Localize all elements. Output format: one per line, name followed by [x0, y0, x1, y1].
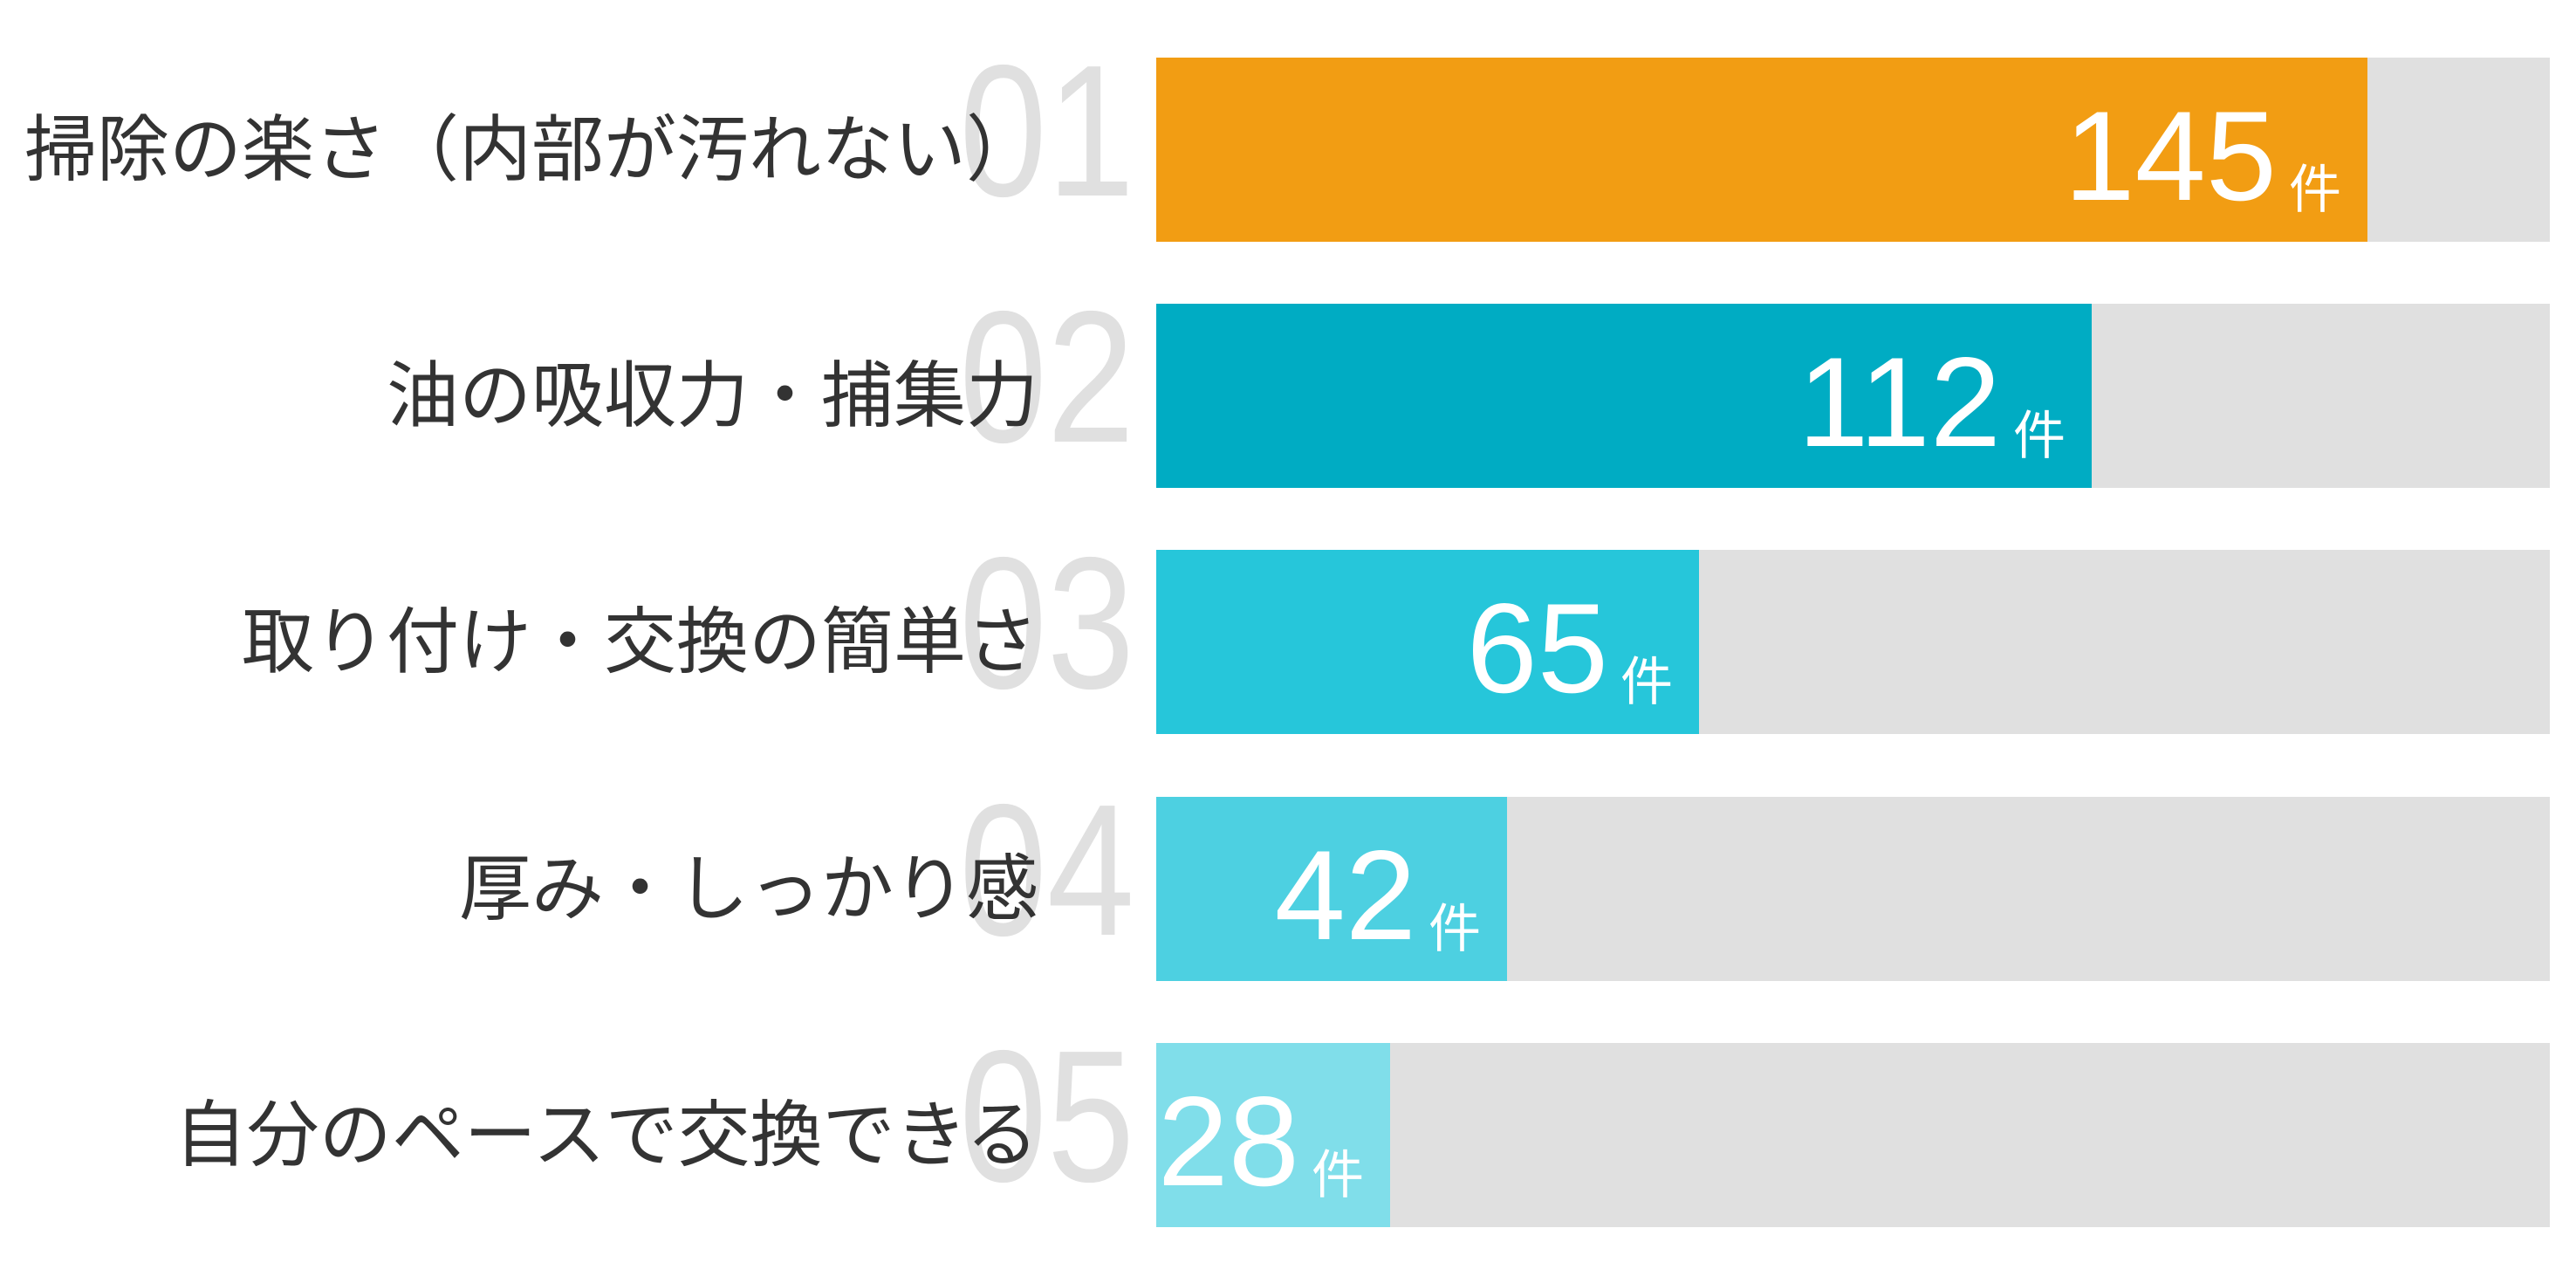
bar 5: [1156, 1043, 1390, 1227]
value 4: [1275, 824, 1481, 966]
label 5: 自分のペースで交換できる: [175, 1094, 1038, 1176]
value 3: 件: [1620, 653, 1673, 711]
value 1: 145: [2064, 85, 2277, 227]
value 5: 件: [1312, 1146, 1364, 1204]
row 5: [175, 1011, 2550, 1227]
value 3: 65: [1467, 577, 1608, 719]
track 3: [1156, 550, 2550, 734]
bar 1: [1156, 58, 2367, 242]
bar 4: [1156, 797, 1507, 981]
value 4: 42: [1275, 824, 1416, 966]
value 3: [1467, 577, 1673, 719]
rank number 02: 02: [959, 271, 1134, 482]
label 1: 掃除の楽さ（内部が汚れない）: [24, 109, 1038, 190]
label 2: 油の吸収力・捕集力: [387, 355, 1038, 436]
row 1: [24, 25, 2550, 242]
rank number 01: 01: [959, 25, 1134, 236]
rank number 04: 04: [959, 765, 1134, 975]
row 4: [459, 765, 2550, 981]
value 4: 件: [1428, 900, 1481, 958]
rank number 05: 05: [959, 1011, 1134, 1221]
value 5: 28: [1158, 1070, 1299, 1212]
track 4: [1156, 797, 2550, 981]
label 3: 取り付け・交換の簡単さ: [242, 601, 1038, 683]
label 4: 厚み・しっかり感: [459, 848, 1038, 930]
track 5: [1156, 1043, 2550, 1227]
value 5: [1158, 1070, 1364, 1212]
track 1: [1156, 58, 2550, 242]
row 2: [387, 271, 2550, 488]
track 2: [1156, 304, 2550, 488]
bar 3: [1156, 550, 1699, 734]
value 1: 件: [2289, 161, 2341, 219]
row 3: [242, 518, 2550, 734]
value 2: 件: [2013, 407, 2066, 465]
value 2: 112: [1798, 331, 2001, 473]
rank number 03: 03: [959, 518, 1134, 728]
bar 2: [1156, 304, 2092, 488]
